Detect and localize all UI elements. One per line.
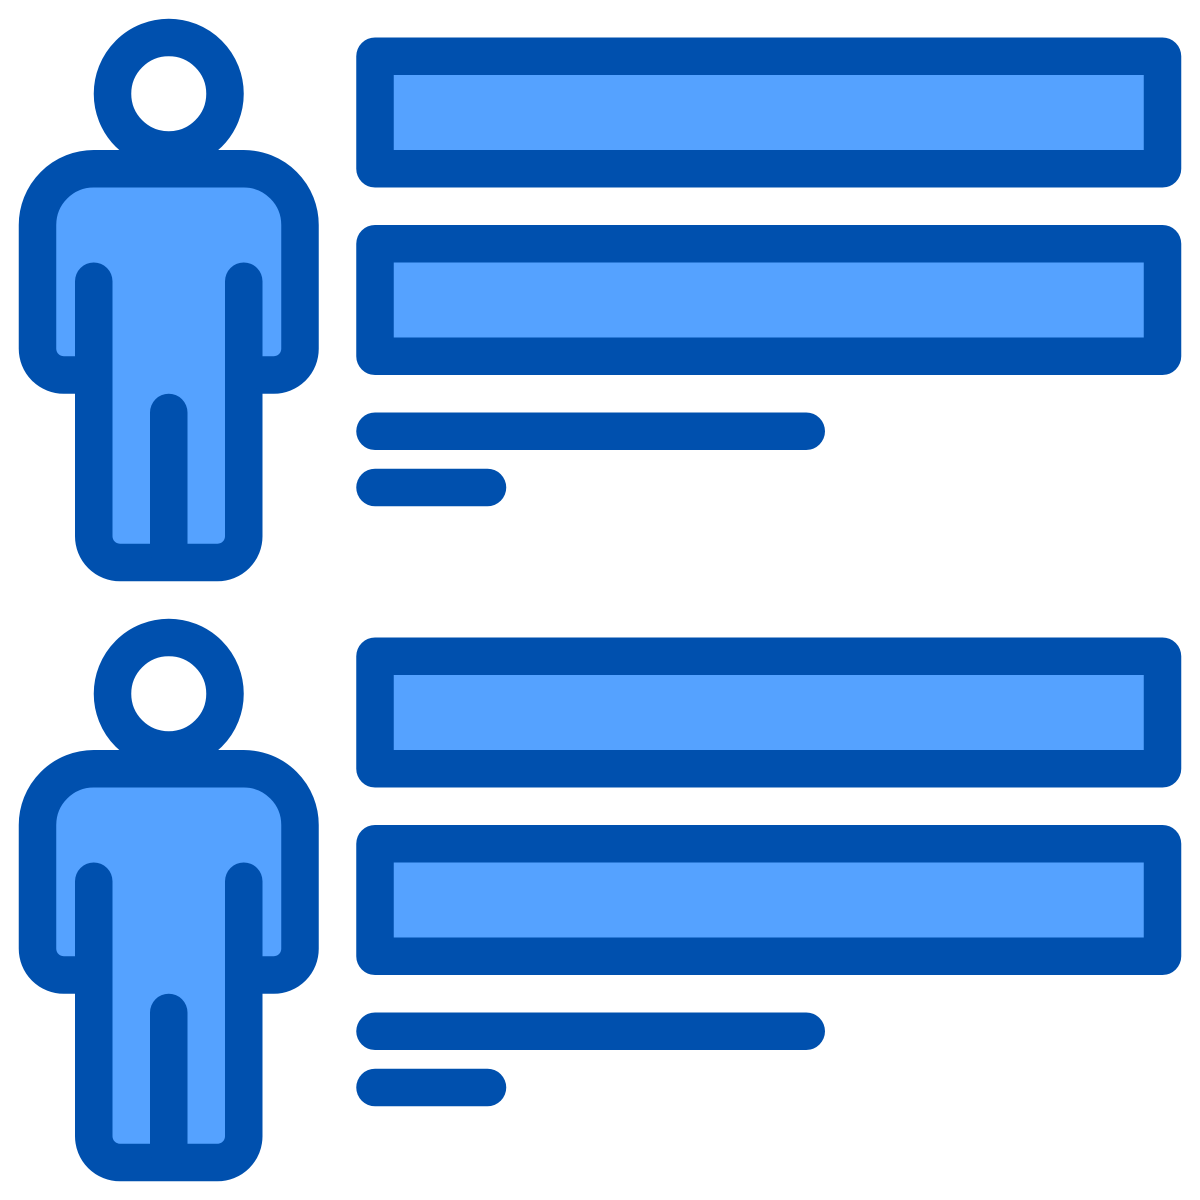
bar 3 — [375, 656, 1162, 769]
text line long 2 — [375, 1012, 806, 1050]
row 1 — [38, 38, 1162, 562]
text line short 2 — [375, 1069, 488, 1106]
bar 1 — [375, 56, 1162, 169]
icon: person 2 — [38, 638, 300, 1162]
text line short — [375, 469, 488, 506]
bar 2 — [375, 244, 1162, 356]
text line long — [375, 412, 806, 450]
bar 4 — [375, 844, 1162, 956]
row 2 — [38, 638, 1162, 1162]
icon: person 1 — [38, 38, 300, 562]
